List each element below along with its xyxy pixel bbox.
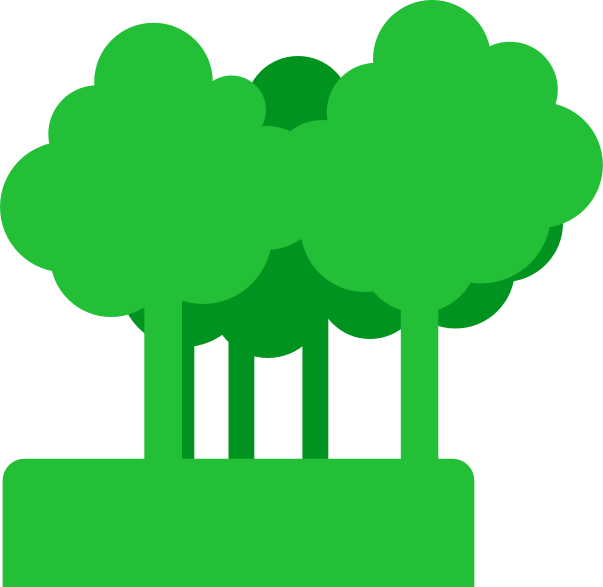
foreground tree left: light green (0, 23, 328, 465)
left trunk (144, 290, 182, 465)
dark trunk right (302, 310, 328, 465)
foreground tree right: light green (272, 0, 603, 465)
ground block (3, 459, 474, 587)
right trunk (401, 290, 438, 465)
left canopy (0, 23, 328, 317)
dark trunk left (170, 320, 194, 465)
background trees: dark green (120, 56, 563, 465)
dark trunk middle (228, 330, 254, 465)
right canopy (272, 0, 603, 313)
dark canopy (120, 56, 563, 358)
